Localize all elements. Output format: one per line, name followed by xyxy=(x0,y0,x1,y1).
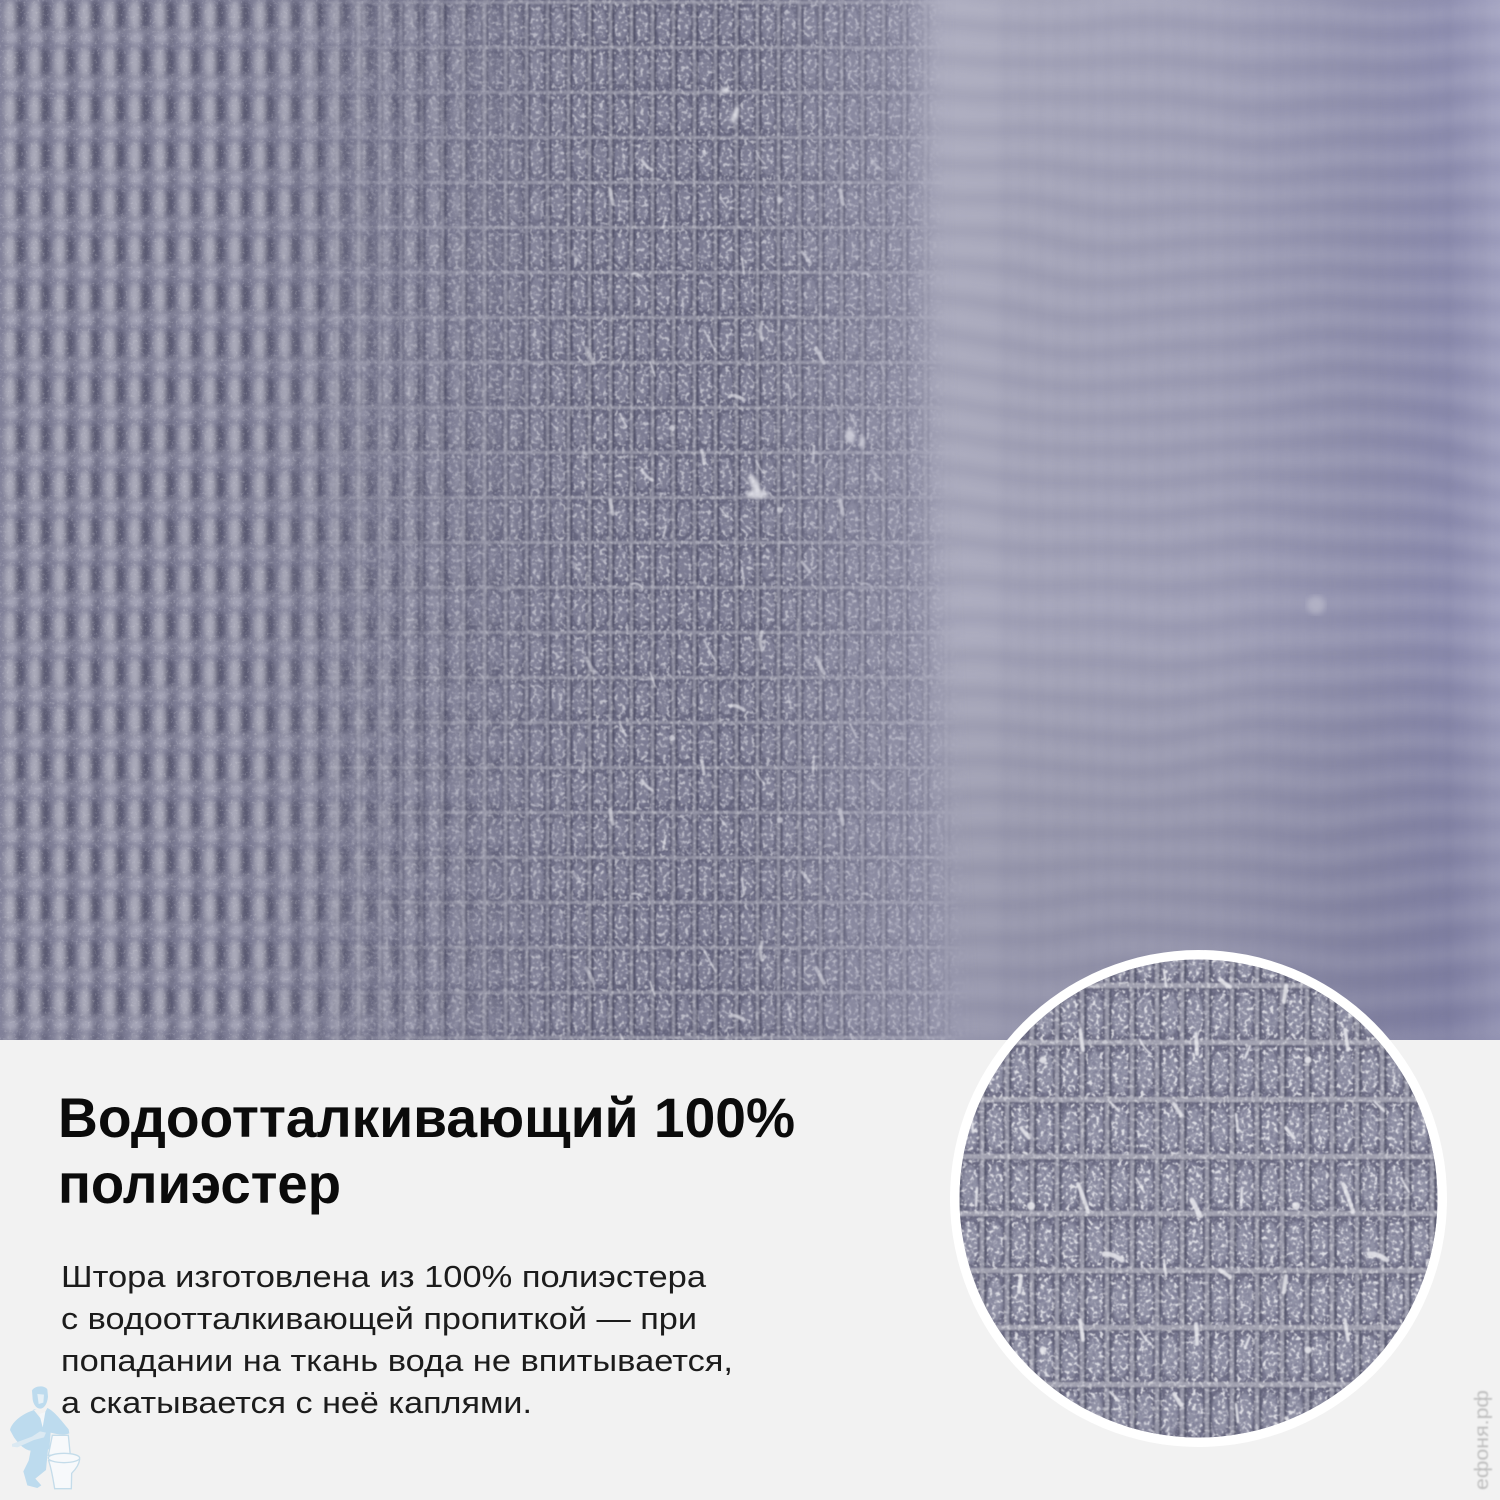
body text: а скатывается с неё каплями. xyxy=(61,1385,532,1420)
icon: plumber with toilet watermark xyxy=(10,1386,80,1489)
photo: in-focus woven curtain fabric xyxy=(0,0,1040,1040)
bottom caption panel xyxy=(0,1040,1500,1500)
inset circle: macro view of water droplets on fabric xyxy=(950,950,1447,1447)
toilet xyxy=(48,1435,80,1489)
body text xyxy=(61,1259,733,1420)
photo: soft out-of-focus curtain fold xyxy=(907,0,1500,1040)
body text: с водоотталкивающей пропиткой — при xyxy=(61,1301,697,1336)
sparkle: water droplets cluster xyxy=(720,87,865,498)
heading: полиэстер xyxy=(58,1152,341,1215)
body text: попадании на ткань вода не впитывается, xyxy=(61,1343,733,1378)
heading: Водоотталкивающий 100% xyxy=(58,1086,795,1149)
heading xyxy=(58,1086,795,1215)
plumber figure xyxy=(10,1386,69,1488)
site watermark: ефоня.рф xyxy=(1472,1390,1493,1490)
body text: Штора изготовлена из 100% полиэстера xyxy=(61,1259,707,1294)
